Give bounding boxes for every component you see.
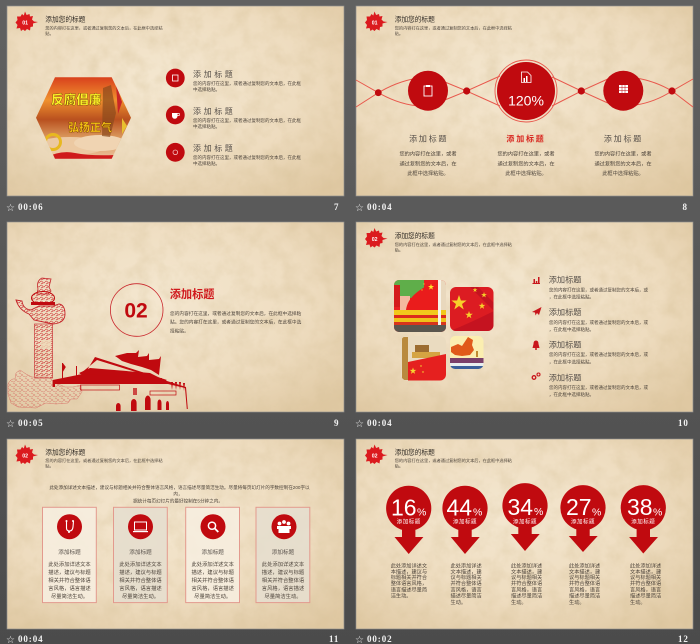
- pin 16% text: 此处添加详述文: [391, 562, 428, 570]
- item 1: 您的内容打在这里，或者通过复制您的文本后，在此框: [193, 80, 301, 87]
- pin 44% text: 议与标题相关: [450, 573, 482, 581]
- slide subtitle: [45, 24, 163, 37]
- pin 34%: %: [534, 506, 543, 518]
- pin 38% text: 描述尽量简洁: [630, 592, 661, 600]
- column 1 text: [399, 134, 457, 177]
- item 3: 您的内容打在这里，或者通过复制您的文本后，在此框: [193, 154, 301, 161]
- card 3: [186, 507, 240, 603]
- slide subtitle: [395, 24, 512, 37]
- column 3 text: 此框中选择粘贴。: [602, 169, 644, 177]
- pin 38% text: 文本描述，建: [630, 568, 661, 576]
- section number circle: [110, 284, 163, 336]
- pin 44% text: 此处添加详述: [450, 562, 482, 570]
- list item 4: [532, 372, 648, 398]
- slide subtitle: [395, 457, 512, 470]
- pin 34% text: 并符合整体语: [511, 579, 542, 587]
- list item 2: ，在此框中选择粘贴。: [549, 326, 594, 333]
- pin 34%: 34: [508, 494, 533, 520]
- pin 44%: %: [473, 506, 482, 518]
- pin 34% text: 描述尽量简洁: [511, 592, 542, 600]
- footer slide 10: 10: [678, 418, 689, 428]
- pin 16%: [386, 486, 431, 554]
- section badge 02: 02: [372, 453, 378, 459]
- column 2 text: 此框中选择粘贴。: [505, 169, 547, 177]
- panel: slide 10: [356, 222, 693, 412]
- section badge 02: [16, 444, 38, 464]
- item 3: [166, 143, 301, 167]
- section badge 02: 02: [372, 237, 378, 243]
- cloud base illustration: [8, 370, 82, 408]
- pin 38% text: 并符合整体语: [630, 579, 661, 587]
- hexagon picture: 反腐倡廉: [51, 92, 102, 107]
- section badge 01: 01: [22, 20, 28, 26]
- card 4: 相关并符合整体语: [262, 576, 305, 584]
- slide heading: 添加您的标题: [395, 231, 435, 240]
- section badge 02: [365, 444, 388, 464]
- footer slide 9: 9: [334, 418, 339, 428]
- column 2 text: 通过复制您的文本后，在: [497, 160, 555, 168]
- pin 38% text: 此处添加详述: [630, 562, 661, 570]
- section badge 01: 01: [372, 20, 378, 26]
- pin 44% text: 描述尽量简洁: [450, 592, 482, 600]
- pin 16% text: 语言描述尽量简: [391, 586, 427, 594]
- footer slide 7: [6, 202, 339, 214]
- pin 34% text: 生动。: [511, 598, 527, 606]
- pin 16% text: 整体语言风格，: [391, 579, 427, 587]
- slide heading: 添加您的标题: [395, 15, 435, 24]
- card 4: [256, 507, 310, 603]
- list item 4: ，在此框中选择粘贴。: [549, 391, 594, 398]
- list item 1: 添加标题: [549, 274, 581, 284]
- footer slide 8: 00:04: [367, 202, 392, 212]
- section text: 择粘贴。: [170, 328, 189, 334]
- slide subtitle: [45, 457, 163, 470]
- slide subtitle: 您的内容打在这里，或者通过复制您的文本后，在此框中选择粘: [45, 24, 163, 32]
- pin 16%: 添加标题: [397, 518, 421, 526]
- pin 34% text: 议与标题相关: [511, 573, 542, 581]
- card 3: 尽量简洁生动。: [194, 592, 231, 600]
- card 1: 言风格，语言描述: [48, 584, 91, 592]
- pin 27% text: 生动。: [569, 598, 585, 606]
- item 2: 您的内容打在这里，或者通过复制您的文本后，在此框: [193, 117, 301, 124]
- panel: slide 8: [356, 6, 693, 196]
- column 2 text: [497, 134, 555, 177]
- section text: 您的内容打在这里，或者通过复制您的文本后，在此框中选择粘: [170, 310, 302, 317]
- section badge 02: [365, 228, 388, 248]
- footer slide 9: 00:05: [18, 418, 44, 428]
- item 3: 中选择粘贴。: [193, 160, 220, 167]
- section title: 添加标题: [170, 287, 214, 301]
- list item 2: 您的内容打在这里，或者通过复制您的文本后，或: [549, 319, 648, 326]
- card 3: 添加标题: [202, 548, 224, 556]
- card 4: 言风格，语言描述: [262, 584, 305, 592]
- section text: [170, 310, 302, 334]
- section badge 02: 02: [22, 453, 28, 459]
- pin 16% text: 本描述，建议与: [391, 568, 427, 576]
- pin 38% text: [630, 562, 661, 606]
- item 3: 添加标题: [193, 143, 235, 153]
- pin 27%: [560, 485, 606, 552]
- card 2: 言风格，语言描述: [119, 584, 162, 592]
- circle: 120%: 120%: [508, 92, 544, 108]
- section badge 01: [16, 12, 38, 31]
- card 2: 描述，建议与标题: [119, 568, 162, 576]
- card 2: 此处添加详述文本: [119, 560, 162, 568]
- card 4: 添加标题: [272, 548, 295, 556]
- slide subtitle: 贴。: [45, 462, 54, 470]
- column 2 text: 您的内容打在这里，或者: [497, 150, 555, 158]
- huabiao column illustration: [16, 278, 65, 378]
- footer slide 7: 00:06: [18, 202, 44, 212]
- footer slide 10: ☆: [355, 419, 364, 430]
- slide heading: 添加您的标题: [45, 448, 86, 456]
- card 4: 描述，建议与标题: [262, 568, 305, 576]
- footer slide 11: 11: [329, 634, 339, 644]
- item 1: [166, 69, 301, 93]
- list item 1: ，在此框中选择粘贴。: [549, 294, 594, 301]
- intro text: 据统计每页幻灯片的最好控制在5分钟之内。: [133, 498, 223, 504]
- photo: huabiao and flag: [401, 336, 446, 381]
- card 1: 尽量简洁生动。: [51, 592, 88, 600]
- panel: slide 11: [7, 439, 344, 629]
- pin 38%: [621, 485, 666, 554]
- pin 44% text: 并符合整体语: [450, 579, 482, 587]
- card 2: [114, 507, 167, 603]
- pin 27% text: 并符合整体语: [569, 579, 600, 587]
- pin 38%: %: [653, 506, 662, 518]
- intro text: [49, 484, 310, 504]
- pin 16% text: 洁生动。: [391, 592, 411, 600]
- connecting curves: [356, 76, 693, 107]
- list item 1: [532, 274, 648, 301]
- pin 44%: 44: [446, 494, 472, 520]
- footer slide 8: 8: [682, 202, 688, 212]
- card 1: 添加标题: [58, 548, 81, 556]
- slide subtitle: 您的内容打在这里，或者通过复制您的文本后，在此框中选择粘: [45, 457, 163, 464]
- list item 4: 您的内容打在这里，或者通过复制您的文本后，或: [549, 384, 648, 391]
- pin 27%: %: [592, 506, 601, 518]
- card 2: 相关并符合整体语: [119, 576, 162, 584]
- pin 27% text: 文本描述，建: [569, 568, 600, 576]
- footer slide 10: 00:04: [367, 418, 392, 428]
- circle: table: [603, 71, 643, 111]
- pin 16% text: 标题相关并符合: [391, 573, 428, 581]
- slide subtitle: 贴。: [45, 30, 54, 37]
- list item 3: 您的内容打在这里，或者通过复制您的文本后，或: [549, 351, 648, 358]
- column 1 text: 此框中选择粘贴。: [407, 169, 449, 177]
- slide heading: 添加您的标题: [45, 15, 86, 24]
- card 2: 尽量简洁生动。: [122, 592, 159, 600]
- footer slide 11: 00:04: [18, 634, 44, 644]
- card 1: 描述，建议与标题: [48, 568, 91, 576]
- column 1 text: 您的内容打在这里，或者: [399, 150, 457, 158]
- pin 44%: [442, 486, 488, 554]
- slide subtitle: 贴。: [395, 246, 403, 254]
- tiananmen illustration: [53, 350, 188, 411]
- pin 38%: 38: [627, 494, 653, 520]
- pin 27% text: 言风格，语言: [569, 586, 600, 594]
- card 3: 此处添加详述文本: [192, 560, 235, 568]
- footer slide 9: ☆: [6, 419, 15, 430]
- pin 34% text: [511, 562, 542, 606]
- slide subtitle: 您的内容打在这里，或者通过复制您的文本后，在此框中选择粘: [395, 457, 512, 464]
- column 1 text: 添加标题: [409, 134, 448, 144]
- footer slide 11: [6, 634, 339, 644]
- item 2: 添加标题: [193, 106, 235, 116]
- photo: waving flag: [450, 287, 494, 331]
- pin 16%: 16: [391, 494, 417, 520]
- slide heading: 添加您的标题: [395, 448, 435, 456]
- pin 34% text: 言风格，语言: [511, 586, 542, 594]
- item 2: [166, 106, 301, 130]
- footer slide 8: [355, 202, 688, 214]
- pin 16%: %: [417, 506, 426, 518]
- pin 38% text: 议与标题相关: [630, 573, 661, 581]
- footer slide 12: 00:02: [367, 634, 392, 644]
- list item 2: [532, 307, 648, 333]
- panel: slide 12: [356, 439, 693, 629]
- card 4: 尽量简洁生动。: [264, 592, 302, 600]
- card 4: 此处添加详述文本: [262, 560, 305, 568]
- pin 44% text: 文本描述，建: [450, 568, 482, 576]
- pin 38% text: 生动。: [630, 598, 646, 606]
- circle: clipboard: [408, 71, 448, 111]
- pin 44% text: [450, 562, 482, 606]
- photo: china map: [450, 336, 484, 369]
- list item 3: [532, 340, 648, 366]
- footer slide 7: ☆: [6, 203, 15, 214]
- footer slide 9: [6, 418, 339, 430]
- list item 3: 添加标题: [549, 340, 581, 350]
- slide subtitle: 贴。: [395, 462, 403, 470]
- item 2: 中选择粘贴。: [193, 123, 220, 130]
- slide subtitle: 您的内容打在这里，或者通过复制您的文本后，在此框中选择粘: [395, 241, 512, 248]
- column 3 text: 您的内容打在这里，或者: [594, 150, 652, 158]
- column 1 text: 通过复制您的文本后，在: [399, 160, 457, 168]
- pin 27% text: 议与标题相关: [569, 573, 600, 581]
- section text: 贴。您的内容打在这里，或者通过复制您的文本后，在此框中选: [170, 318, 302, 326]
- slide subtitle: [395, 241, 512, 254]
- intro text: 此处添加详述文本描述，建议与标题相关并符合整体语言风格，语言描述尽量简洁生动。尽量将每页幻灯片的字数控制在200字以: [49, 484, 310, 491]
- card 1: [42, 507, 96, 603]
- pin 34%: 添加标题: [513, 518, 537, 526]
- panel: slide 7: [7, 6, 344, 196]
- slide subtitle: 贴。: [395, 30, 403, 37]
- pin 34% text: 文本描述，建: [511, 568, 542, 576]
- footer slide 12: [355, 634, 689, 644]
- column 3 text: [594, 134, 652, 177]
- list item 3: ，在此框中选择粘贴。: [549, 358, 594, 366]
- column 3 text: 通过复制您的文本后，在: [594, 160, 652, 168]
- intro text: 内，: [173, 490, 183, 498]
- pin 44%: 添加标题: [453, 518, 477, 526]
- pin 27%: 27: [566, 494, 592, 520]
- card 2: 添加标题: [129, 548, 152, 556]
- connector dots: [375, 87, 676, 96]
- photo: parade flag: [394, 280, 446, 332]
- column 3 text: 添加标题: [604, 134, 643, 144]
- hexagon picture: 弘扬正气: [68, 120, 112, 134]
- pin 27%: 添加标题: [571, 518, 595, 526]
- card 3: 相关并符合整体语: [192, 576, 235, 584]
- panel: slide 9: [7, 222, 344, 412]
- card 3: 言风格，语言描述: [192, 584, 235, 592]
- pin 44% text: 生动。: [450, 598, 466, 606]
- hexagon picture: [34, 77, 131, 161]
- footer slide 7: 7: [334, 202, 339, 212]
- section number circle: 02: [124, 300, 148, 322]
- item 1: 中选择粘贴。: [193, 86, 220, 93]
- list item 4: 添加标题: [549, 372, 581, 382]
- pin 27% text: 此处添加详述: [569, 562, 600, 570]
- pin 27% text: [569, 562, 600, 606]
- pin 44% text: 言风格，语言: [450, 586, 482, 594]
- pin 16% text: [391, 562, 428, 600]
- list item 1: 您的内容打在这里，或者通过复制您的文本后，或: [549, 286, 648, 294]
- footer slide 10: [355, 418, 689, 430]
- item 1: 添加标题: [193, 69, 235, 79]
- column 2 text: 添加标题: [506, 134, 546, 144]
- pin 38% text: 言风格，语言: [630, 586, 661, 594]
- circle: 120%: [495, 60, 557, 122]
- footer slide 12: 12: [678, 634, 689, 644]
- slide subtitle: 您的内容打在这里，或者通过复制您的文本后，在此框中选择粘: [395, 24, 512, 32]
- card 1: 此处添加详述文本: [48, 560, 91, 568]
- section badge 01: [365, 12, 388, 31]
- pin 34% text: 此处添加详述: [511, 562, 542, 570]
- pin 27% text: 描述尽量简洁: [569, 592, 600, 600]
- card 3: 描述，建议与标题: [192, 568, 235, 576]
- card 1: 相关并符合整体语: [48, 576, 91, 584]
- pin 38%: 添加标题: [631, 518, 655, 526]
- list item 2: 添加标题: [549, 307, 581, 317]
- pin 34%: [502, 483, 548, 551]
- footer slide 8: ☆: [355, 203, 364, 214]
